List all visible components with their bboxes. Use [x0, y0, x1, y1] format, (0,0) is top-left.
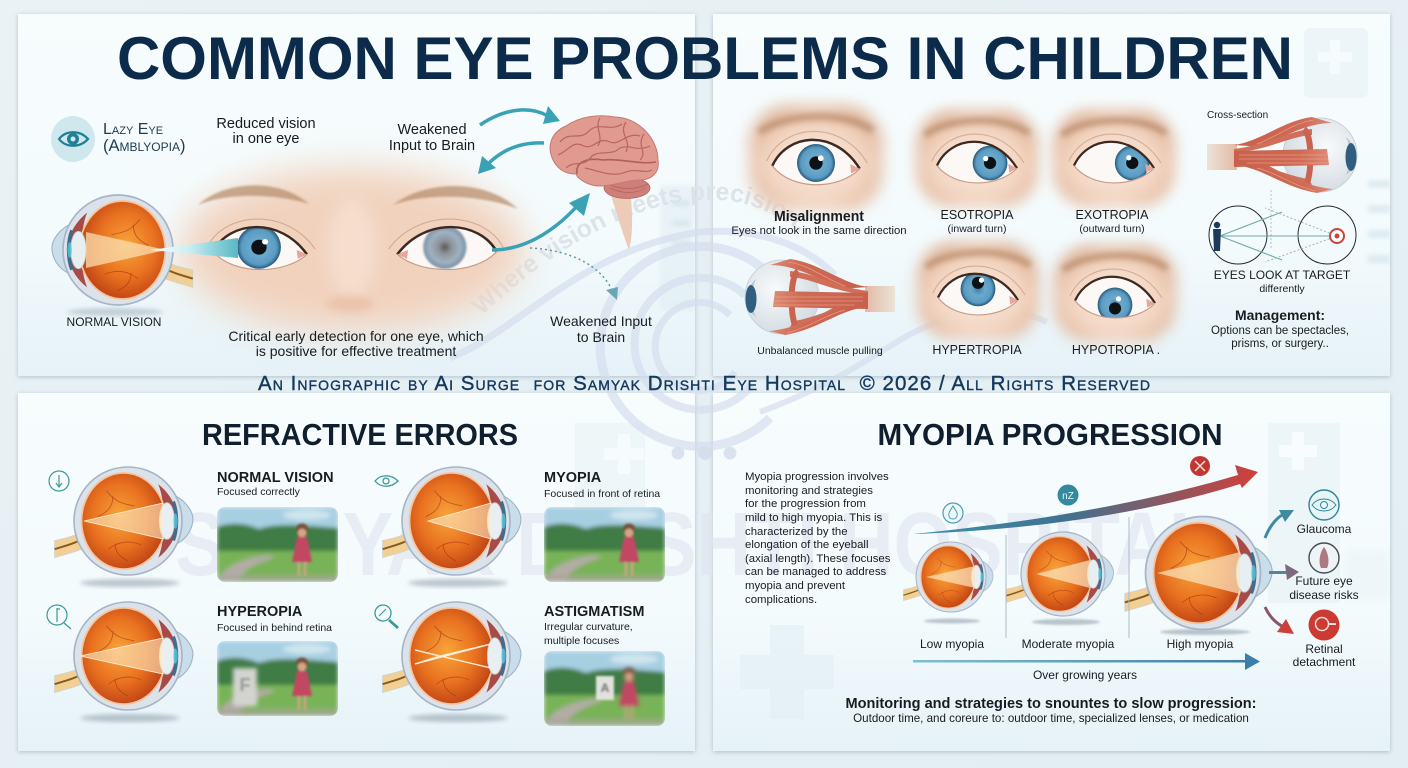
image: hyperopic scene: F	[240, 675, 250, 695]
text: myopia description: monitoring and strategies	[745, 485, 873, 497]
icon: hyperopia	[47, 605, 71, 629]
arrow: to future risks	[1269, 564, 1299, 580]
icon: normal vision	[49, 471, 69, 491]
label: future eye risks	[1289, 574, 1359, 602]
section: refractive errors	[47, 417, 665, 726]
text: monitoring strategies	[846, 696, 1256, 725]
label: hypotropia: HYPOTROPIA .	[1072, 343, 1160, 357]
label: eyes look at target	[1214, 268, 1351, 295]
text: management: prisms, or surgery..	[1231, 338, 1329, 350]
panel: refractive errors background	[18, 393, 695, 751]
label: hyperopia: Focused in behind retina	[217, 622, 332, 634]
heading: lazy eye	[103, 121, 185, 155]
icon: moderate myopia	[1058, 484, 1078, 506]
image: hyperopic scene	[217, 641, 338, 716]
icon: healthy eye	[207, 219, 315, 270]
label: misalignment	[731, 208, 907, 237]
text: myopia description	[745, 471, 891, 606]
label: astigmatism	[544, 604, 644, 647]
label: esotropia	[941, 208, 1014, 235]
illustration: eye muscles right-facing	[1207, 117, 1357, 193]
labels: myopia stages: Moderate myopia	[1022, 637, 1115, 651]
label: eyes look at target: differently	[1259, 283, 1305, 295]
label: retinal detachment: Retinal	[1305, 642, 1343, 656]
label: normal vision	[217, 470, 334, 498]
text: management: Options can be spectacles,	[1211, 325, 1349, 337]
arrow: input to brain top	[480, 106, 560, 125]
eye: hypotropia	[1054, 246, 1176, 342]
label: esotropia: (inward turn)	[948, 223, 1006, 235]
text: weakened input: Input to Brain	[389, 138, 475, 154]
watermark: concentric eye logo	[450, 231, 1047, 460]
text: weakened input lower: Weakened Input	[550, 313, 652, 329]
diagram: eyes look at target	[1209, 190, 1356, 264]
arrow: dotted weak input	[530, 248, 618, 300]
arrow: to retinal detachment	[1265, 607, 1294, 634]
watermark: hospital name: SAMYAK DRISHTI HOSPITAL	[175, 495, 1215, 595]
image: clear scene	[217, 507, 338, 582]
label: hypertropia: HYPERTROPIA	[932, 343, 1022, 357]
eye: esotropia	[916, 111, 1038, 206]
label: glaucoma: Glaucoma	[1297, 522, 1352, 536]
heading: refractive errors: REFRACTIVE ERRORS	[202, 417, 518, 452]
panel: myopia progression background	[713, 393, 1390, 751]
dividers between stages	[1006, 517, 1129, 638]
text: reduced vision: in one eye	[233, 131, 299, 147]
text: reduced vision: Reduced vision	[216, 116, 316, 132]
text: early detection	[228, 328, 484, 359]
arrow: back from brain	[478, 143, 544, 174]
image: myopic scene	[544, 507, 665, 582]
label: astigmatism: ASTIGMATISM	[544, 604, 644, 620]
eye: hypertropia	[917, 243, 1039, 338]
text: weakened input lower	[550, 313, 652, 345]
icon: astigmatism	[375, 605, 398, 628]
label: myopia	[544, 470, 660, 500]
label: retinal detachment: detachment	[1293, 655, 1356, 669]
label: hyperopia: HYPEROPIA	[217, 604, 303, 620]
text: myopia description: complications.	[745, 594, 817, 606]
illustration: eyeball with beam	[52, 195, 238, 316]
label: astigmatism: multiple focuses	[544, 635, 619, 647]
text: weakened input lower: to Brain	[577, 329, 625, 345]
icon: moderate myopia: nZ	[1062, 491, 1074, 502]
text: myopia description: elongation of the eyeball	[745, 539, 868, 551]
text: early detection: Critical early detection for one eye, which	[228, 328, 484, 344]
labels: myopia stages	[920, 637, 1234, 651]
text: management	[1211, 307, 1349, 350]
text: myopia description: for the progression from	[745, 498, 866, 510]
label: eyes look at target: EYES LOOK AT TARGET	[1214, 268, 1351, 282]
image: astigmatic scene: A	[601, 681, 610, 695]
eye: hyperopia	[55, 602, 193, 722]
arrow: growing years	[913, 653, 1260, 670]
label: normal vision: NORMAL VISION	[217, 470, 334, 486]
icon: future eye disease	[1309, 543, 1339, 573]
arrow: to glaucoma	[1265, 510, 1294, 538]
heading: myopia progression: MYOPIA PROGRESSION	[878, 417, 1222, 452]
label: myopia: Focused in front of retina	[544, 488, 660, 500]
label: myopia: MYOPIA	[544, 470, 602, 486]
label: retinal detachment	[1293, 642, 1356, 669]
icon: myopia eye	[375, 476, 398, 486]
label: future eye risks: disease risks	[1289, 588, 1359, 602]
text: myopia description: characterized by the	[745, 526, 848, 538]
label: cross-section: Cross-section	[1207, 110, 1268, 121]
icon: retinal detachment	[1308, 610, 1340, 640]
watermark: tagline: Where vision meets precision.	[472, 186, 802, 312]
label: future eye risks: Future eye	[1295, 574, 1353, 588]
icon: weak eye	[389, 219, 503, 270]
section: misalignment	[731, 106, 1357, 357]
text: myopia description: Myopia progression involves	[745, 471, 889, 483]
panel: misalignment background	[713, 14, 1390, 376]
label: exotropia: EXOTROPIA	[1076, 208, 1149, 222]
label: exotropia	[1076, 208, 1149, 235]
illustration: face with both eyes	[180, 168, 524, 332]
text: myopia description: can be managed to address	[745, 566, 887, 578]
credit line: An Infographic by Ai Surge for Samyak Drishti Eye Hospital © 2026 / All Rights Reserved	[258, 372, 1150, 395]
text: myopia description: myopia and prevent	[745, 580, 846, 592]
section: myopia progression	[745, 417, 1359, 725]
arrow: rising progression	[913, 465, 1258, 534]
eye: astigmatism	[383, 602, 521, 722]
heading: lazy eye: Lazy Eye	[103, 121, 163, 138]
label: normal vision: NORMAL VISION	[67, 315, 161, 329]
section: lazy eye	[51, 106, 658, 359]
text: myopia description: (axial length). These focuses	[745, 553, 891, 565]
icon: high myopia	[1190, 456, 1210, 476]
label: esotropia: ESOTROPIA	[941, 208, 1014, 222]
eye: myopia	[383, 467, 521, 587]
label: normal vision: Focused correctly	[217, 486, 301, 498]
label: astigmatism: Irregular curvature,	[544, 621, 633, 633]
icon: eye badge	[51, 116, 95, 162]
text: reduced vision	[216, 116, 316, 147]
icon: low myopia drop	[943, 503, 963, 523]
illustration: eye muscles left-facing	[745, 259, 895, 335]
text: weakened input	[389, 122, 475, 154]
eye: normal vision	[55, 467, 193, 587]
labels: myopia stages: High myopia	[1167, 637, 1234, 651]
icon: glaucoma	[1309, 490, 1339, 520]
text: early detection: is positive for effective treatment	[256, 343, 456, 359]
eye: high myopia	[1125, 516, 1272, 635]
label: exotropia: (outward turn)	[1079, 223, 1145, 235]
text: management: Management:	[1235, 307, 1325, 323]
text: myopia description: mild to high myopia. This is	[745, 512, 882, 524]
label: misalignment: Eyes not look in the same direction	[731, 225, 907, 237]
label: growing years: Over growing years	[1033, 668, 1137, 682]
label: unbalanced muscle: Unbalanced muscle pulling	[757, 345, 883, 357]
illustration: brain	[550, 116, 658, 250]
title: COMMON EYE PROBLEMS IN CHILDREN	[117, 25, 1293, 92]
eye: exotropia	[1053, 111, 1175, 206]
image: astigmatic scene	[544, 651, 665, 726]
eye: misalignment	[750, 106, 882, 210]
eye: low myopia	[903, 542, 993, 624]
label: hyperopia	[217, 604, 332, 634]
heading: lazy eye: (Amblyopia)	[103, 137, 185, 155]
watermark: hospital shapes and crosses	[575, 28, 1390, 719]
arrow: weak eye to brain	[492, 193, 590, 250]
text: weakened input: Weakened	[397, 122, 467, 138]
labels: myopia stages: Low myopia	[920, 637, 984, 651]
text: monitoring strategies: Outdoor time, and coreure to: outdoor time, specialized lenses, or medication	[853, 712, 1249, 725]
eye: moderate myopia	[1006, 532, 1113, 625]
panel: lazy eye background	[18, 14, 695, 376]
label: misalignment: Misalignment	[774, 208, 864, 225]
text: monitoring strategies: Monitoring and strategies to snountes to slow progression:	[846, 696, 1256, 712]
